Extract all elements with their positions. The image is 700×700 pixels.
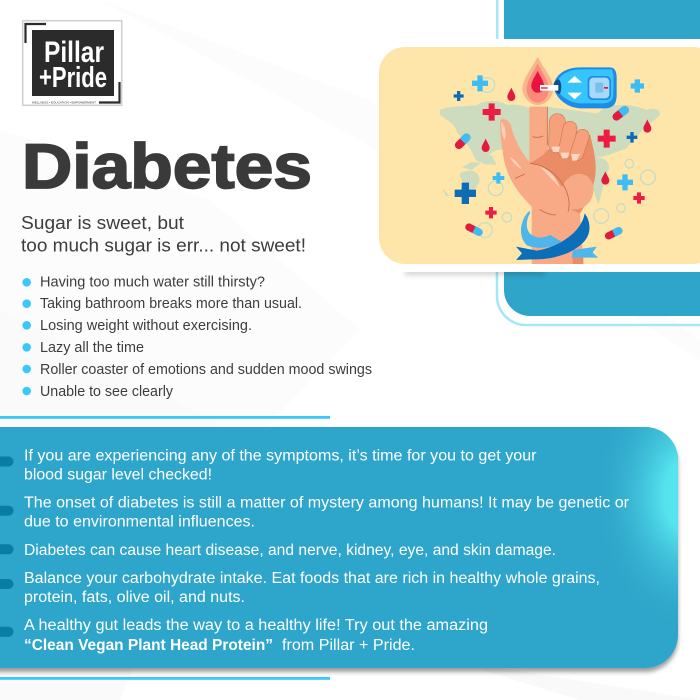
subtitle: too much sugar is err... not sweet! xyxy=(21,235,306,256)
highlights xyxy=(501,122,560,187)
advice text: A healthy gut leads the way to a healthy life! Try out the amazing xyxy=(24,617,488,634)
bottom teal block xyxy=(497,272,700,325)
top teal block xyxy=(496,0,700,39)
advice text: “Clean Vegan Plant Head Protein” xyxy=(24,637,273,654)
finger nails xyxy=(552,147,580,161)
symptom list: Unable to see clearly xyxy=(40,384,174,400)
pills xyxy=(453,104,630,241)
glucose meter xyxy=(540,67,617,108)
illustration: hand with glucose meter xyxy=(440,57,660,264)
world map xyxy=(440,101,660,204)
advice text: blood sugar level checked! xyxy=(24,466,212,484)
symptom list: Losing weight without exercising. xyxy=(40,318,252,334)
wrist shade xyxy=(573,255,583,264)
advice text: If you are experiencing any of the symptoms, it’s time for you to get your xyxy=(24,448,536,465)
advice panel xyxy=(0,427,678,668)
symptom list: Having too much water still thirsty? xyxy=(40,275,265,291)
logo: Pillar xyxy=(44,36,104,69)
curled fingers xyxy=(557,122,583,154)
hand xyxy=(500,107,599,264)
symptom list: Taking bathroom breaks more than usual. xyxy=(40,296,302,312)
advice text: protein, fats, olive oil, and nuts. xyxy=(24,589,245,606)
thumb mound xyxy=(555,168,599,215)
divider line top xyxy=(0,416,330,419)
symptom list xyxy=(22,275,372,400)
title: Diabetes xyxy=(22,132,312,202)
advice text: The onset of diabetes is still a matter of mystery among humans! It may be genetic or xyxy=(24,495,629,512)
back of hand shade xyxy=(530,135,596,213)
ribbon xyxy=(516,211,598,260)
blood drop glow xyxy=(522,57,553,105)
symptom list: Roller coaster of emotions and sudden mood swings xyxy=(40,362,372,378)
illustration card xyxy=(379,39,700,275)
palm, index finger and thumb xyxy=(500,107,596,264)
advice text: due to environmental influences. xyxy=(24,514,255,531)
advice text: Balance your carbohydrate intake. Eat foods that are rich in healthy whole grains, xyxy=(24,570,600,587)
logo xyxy=(23,21,122,105)
symptom list: Lazy all the time xyxy=(40,340,144,356)
creases xyxy=(515,107,569,215)
subtitle xyxy=(21,212,306,256)
logo: WELLNESS • EDUCATION • EMPOWERMENT xyxy=(32,100,96,104)
crosses xyxy=(454,75,645,218)
subtitle: Sugar is sweet, but xyxy=(21,212,184,233)
divider line bottom xyxy=(0,677,330,680)
logo: +Pride xyxy=(39,62,107,94)
blood drops xyxy=(482,88,651,185)
advice text xyxy=(24,448,629,654)
advice text: from Pillar + Pride. xyxy=(282,637,415,654)
bullet tabs xyxy=(0,456,14,637)
rings xyxy=(478,78,655,237)
advice text: Diabetes can cause heart disease, and nerve, kidney, eye, and skin damage. xyxy=(24,542,556,559)
